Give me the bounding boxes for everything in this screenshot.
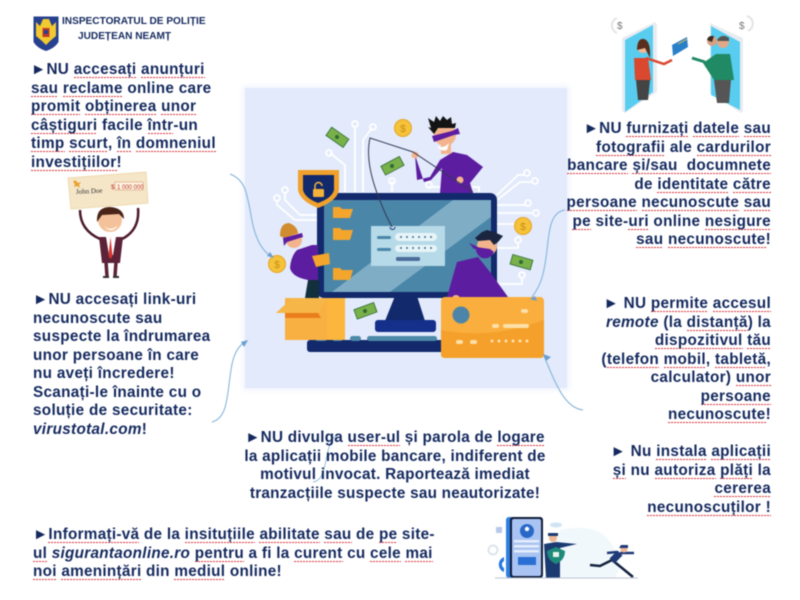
text block: card data warning: sau necunoscute! bbox=[636, 231, 771, 248]
text block: card data warning: de identitate către bbox=[634, 176, 771, 192]
top hacker with fishing rod bbox=[415, 152, 483, 193]
heading: institution name: INSPECTORATUL DE POLIȚIE bbox=[62, 16, 206, 27]
right hacker bbox=[447, 257, 508, 297]
text block: remote access warning: ► NU permite accesul bbox=[604, 295, 771, 312]
text block: remote access warning: persoane bbox=[701, 388, 771, 404]
text block: suspicious links warning: ►NU accesați link-uri bbox=[33, 291, 196, 308]
text block: suspicious links warning: necunoscute sau bbox=[33, 310, 162, 326]
text block: remote access warning: (telefon mobil, tabletă, bbox=[601, 350, 771, 368]
panel: central illustration background bbox=[245, 88, 567, 388]
icon: man holding a giant cheque bbox=[67, 171, 149, 279]
central illustration: phishing hackers and computer: $ bbox=[274, 260, 280, 271]
banknotes bbox=[326, 127, 533, 319]
text block: suspicious links warning: suspecte la îndrumarea bbox=[33, 328, 210, 345]
text block: credentials warning: tranzacțiile suspecte sau neautorizate! bbox=[250, 484, 540, 502]
circuit lines bbox=[274, 121, 539, 284]
text block: stay informed bbox=[32, 526, 435, 581]
text block: ads warning: câștiguri facile într-un bbox=[31, 116, 198, 134]
bank card bbox=[441, 297, 544, 358]
text block: stay informed: ►Informați-vă de la insituțiile abilitate sau de pe site- bbox=[33, 526, 435, 543]
heading: institution name bbox=[62, 16, 206, 42]
text block: ads warning: promit obținerea unor bbox=[31, 98, 196, 115]
text block: card data warning: persoane necunoscute sau bbox=[567, 194, 771, 211]
icon: police crest bbox=[32, 16, 60, 52]
text block: card data warning: pe site-uri online nesigure bbox=[572, 212, 771, 230]
text block: remote access warning: remote (la distanță) la bbox=[606, 314, 771, 330]
text block: ads warning: investițiilor! bbox=[31, 154, 122, 170]
text block: ads warning bbox=[30, 61, 217, 172]
text block: credentials warning: motivul invocat. Raportează imediat bbox=[260, 466, 530, 483]
keyboard bbox=[307, 340, 517, 352]
text block: remote access warning bbox=[601, 295, 772, 424]
text block: app installation warning: cererea bbox=[714, 480, 771, 497]
text block: ads warning: ►NU accesați anunțuri bbox=[31, 61, 205, 78]
text block: credentials warning bbox=[244, 429, 546, 502]
icon: man holding a giant cheque: $ bbox=[111, 184, 115, 191]
text block: card data warning: fotografii ale cardurilor bbox=[596, 138, 771, 156]
text block: suspicious links warning: unor persoane în care bbox=[33, 346, 199, 364]
illustration: card exchange between phones bbox=[610, 15, 754, 113]
text block: credentials warning: la aplicații mobile bancare, indiferent de bbox=[244, 448, 546, 464]
text block: app installation warning: și nu autoriza plăți la bbox=[613, 462, 771, 478]
text block: remote access warning: calculator) unor bbox=[651, 369, 771, 386]
text block: credentials warning: ►NU divulga user-ul și parola de logare bbox=[245, 429, 545, 446]
central illustration: phishing hackers and computer: $ bbox=[400, 124, 406, 135]
coins bbox=[268, 120, 532, 272]
text block: suspicious links warning: Scanați-le înainte cu o bbox=[33, 384, 201, 400]
monitor bbox=[385, 296, 425, 321]
illustration: phone, police officer and running thief bbox=[487, 516, 638, 579]
heading: institution name: JUDEȚEAN NEAMȚ bbox=[78, 31, 171, 42]
text block: card data warning: bancare și/sau documnete bbox=[567, 157, 771, 174]
folders bbox=[333, 207, 353, 218]
icon: man holding a giant cheque: 1 000 000 bbox=[117, 185, 144, 191]
text block: app installation warning: ► Nu instala aplicații bbox=[611, 443, 771, 460]
text block: app installation warning: necunoscuților ! bbox=[647, 498, 771, 516]
text block: card data warning: ►NU furnizați datele sau bbox=[584, 120, 771, 137]
text block: suspicious links warning bbox=[32, 291, 211, 438]
illustration: card exchange between phones: $ bbox=[739, 21, 745, 32]
text block: app installation warning bbox=[611, 443, 772, 517]
icon: man holding a giant cheque: John Doe bbox=[76, 187, 103, 196]
shield with padlock bbox=[298, 170, 339, 208]
text block: stay informed: noi amenințări din mediul online! bbox=[33, 563, 282, 580]
illustration: card exchange between phones: $ bbox=[617, 21, 623, 32]
login form bbox=[371, 226, 445, 266]
text block: remote access warning: necunoscute! bbox=[668, 406, 771, 423]
text block: suspicious links warning: virustotal.com! bbox=[33, 420, 147, 438]
box bbox=[285, 298, 345, 340]
central illustration: phishing hackers and computer: $ bbox=[520, 222, 526, 233]
text block: suspicious links warning: nu aveți încredere! bbox=[33, 365, 175, 382]
text block: ads warning: sau reclame online care bbox=[31, 80, 211, 96]
text block: remote access warning: dispozitivul tău bbox=[655, 332, 771, 349]
text block: ads warning: timp scurt, în domneniul bbox=[31, 135, 216, 152]
text block: stay informed: ul sigurantaonline.ro pentru a fi la curent cu cele mai bbox=[33, 544, 433, 562]
text block: card data warning bbox=[566, 120, 772, 249]
text block: suspicious links warning: soluție de securitate: bbox=[33, 402, 193, 419]
left hacker bbox=[305, 280, 319, 298]
